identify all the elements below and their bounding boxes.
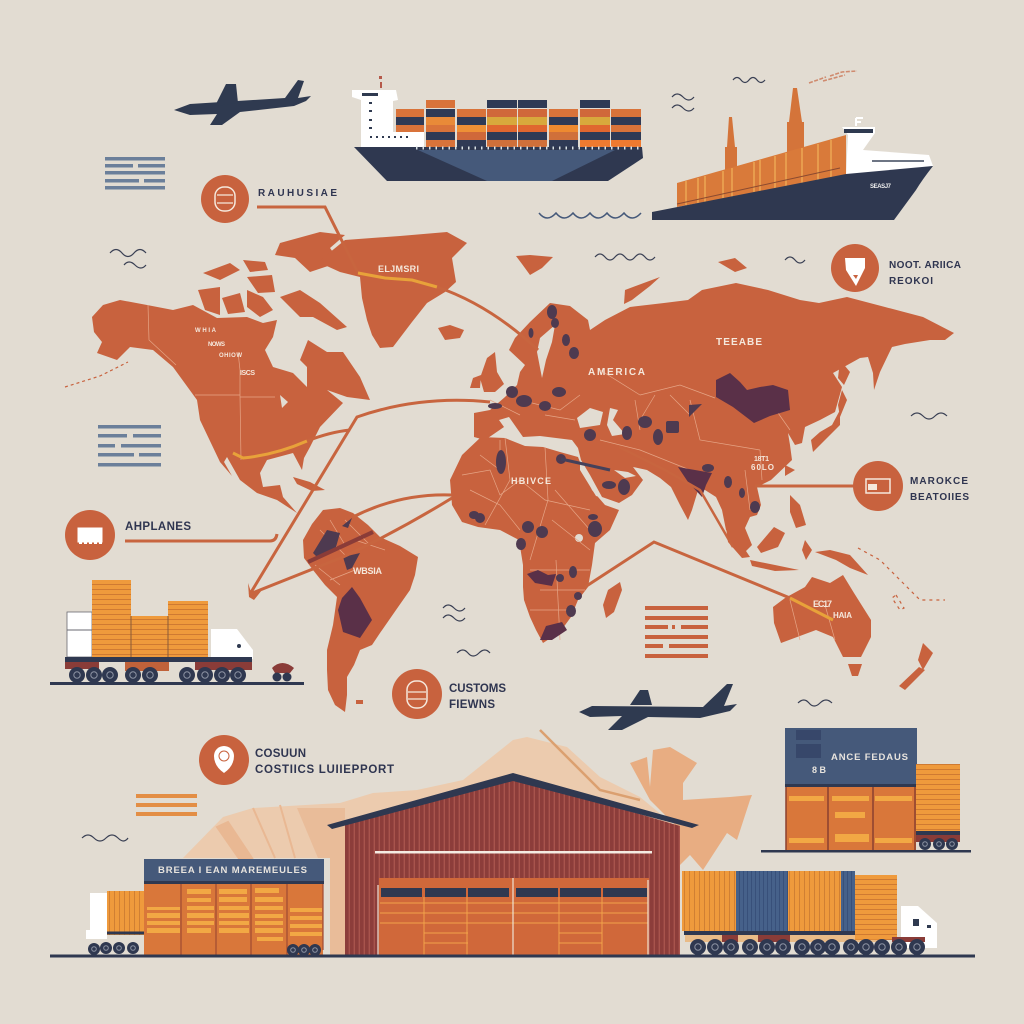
- british isles: [470, 352, 504, 392]
- cab: [901, 906, 937, 948]
- hull blue panel: [418, 150, 615, 181]
- warehouse: central: [327, 773, 699, 956]
- warehouse: left: BREEA I EAN MAREMEULES: [158, 865, 308, 876]
- callout: marokce beatoiies: [853, 461, 970, 511]
- route lines: [125, 207, 855, 620]
- greenland: [318, 232, 467, 348]
- cargo ship: angled view: [652, 88, 933, 220]
- falklands: [356, 700, 363, 704]
- new zealand: [899, 643, 933, 690]
- route: asia leader: [755, 484, 855, 488]
- dashed bars: lower left: [136, 794, 197, 816]
- arctic russia island: [718, 258, 747, 272]
- map labels: OHIOW: [219, 353, 243, 359]
- door windows: [381, 888, 647, 897]
- bridge: [842, 127, 933, 176]
- ship windows: [362, 93, 408, 138]
- callout: north africa region: [831, 244, 962, 292]
- door lines: [380, 897, 648, 955]
- map labels: ISCS: [240, 370, 256, 377]
- chassis: [65, 657, 252, 662]
- pacific islands: [858, 548, 945, 610]
- callout: rauhusiae: RAUHUSIAE: [258, 188, 338, 199]
- scalloped wave: [539, 213, 641, 218]
- map labels: NOWS: [208, 342, 226, 348]
- wave doodles: [82, 250, 947, 841]
- callout: airplanes: AHPLANES: [125, 521, 192, 533]
- interior borders: [148, 305, 835, 640]
- white trim: [375, 851, 652, 854]
- container ship: side view: [352, 76, 643, 181]
- callout: marokce beatoiies: BEATOIIES: [910, 492, 970, 503]
- iceland: [438, 325, 464, 340]
- callout: rauhusiae: [201, 175, 338, 223]
- arctic islands: [198, 232, 347, 330]
- distant bird scribble: [809, 71, 857, 83]
- building: right upper: 8 B: [812, 765, 826, 775]
- callout: marokce beatoiies: MAROKCE: [910, 476, 969, 487]
- warehouse: left: [86, 859, 324, 956]
- truck: right lower: [682, 871, 937, 955]
- madagascar: [603, 582, 622, 618]
- white box: [67, 612, 92, 657]
- truck: left: [50, 580, 304, 685]
- map labels: EC17: [813, 599, 833, 609]
- japan: [811, 360, 850, 452]
- ship name: SEASJ7: [870, 184, 892, 190]
- region: india: [678, 467, 712, 497]
- map labels: HAIA: [833, 611, 853, 620]
- route: airplanes label leader: [125, 534, 277, 541]
- map labels: 60LO: [751, 463, 775, 472]
- ship superstructure: [352, 90, 424, 147]
- tasmania: [848, 664, 862, 676]
- world map: [65, 232, 954, 712]
- blue upper: [785, 728, 917, 784]
- building: right upper: ANCE FEDAUS: [831, 752, 909, 763]
- africa: [450, 437, 619, 643]
- wheels: [919, 838, 958, 850]
- callout: airplanes: [65, 510, 192, 560]
- taiwan / philippines: [785, 465, 806, 528]
- occupied regions: [313, 305, 790, 640]
- door frame: [379, 878, 649, 955]
- europe and asia blobs: [506, 386, 518, 398]
- building: right upper: [761, 728, 971, 852]
- plane: top left: [174, 80, 311, 125]
- map labels: WBSIA: [353, 566, 383, 576]
- callout: customs: [392, 669, 507, 719]
- body: [144, 884, 323, 955]
- dashed bars: centre: [645, 606, 708, 658]
- region: mongolia: [716, 373, 790, 423]
- ship hull: [354, 147, 643, 181]
- callout: costiics: [199, 735, 395, 785]
- smoke stacks: [725, 117, 737, 175]
- map labels: ELJMSRI: [378, 264, 420, 274]
- map labels: HBIVCE: [511, 476, 552, 486]
- sign: [144, 859, 324, 881]
- map labels: WHIA: [195, 328, 217, 334]
- africa blobs: [496, 450, 506, 474]
- map labels: TEEABE: [716, 337, 763, 348]
- orange cargo: [92, 580, 131, 657]
- mast: [379, 76, 382, 88]
- inland seas and bays: [280, 325, 636, 542]
- callout: north africa region: NOOT. ARIICA: [889, 260, 962, 271]
- callout: costiics: COSTIICS LUIIEPPORT: [255, 764, 395, 776]
- ground: [50, 682, 304, 685]
- route: africa to australia: [585, 542, 790, 598]
- region: south america lower: [338, 587, 372, 638]
- map labels: [195, 264, 853, 620]
- callout: customs: FIEWNS: [449, 699, 496, 711]
- route: north america to europe: [250, 400, 490, 594]
- container stacks: [396, 100, 641, 147]
- trailer: [107, 891, 145, 935]
- wave doodle: between ships: [672, 94, 694, 111]
- callout: customs: CUSTOMS: [449, 683, 507, 695]
- novaya zemlya: [624, 277, 660, 304]
- dashed bars: left: [98, 425, 161, 466]
- chassis: [684, 931, 855, 935]
- plane: lower centre: [579, 684, 737, 730]
- south america: [303, 508, 418, 712]
- north america: [92, 300, 370, 513]
- body: [785, 784, 916, 787]
- callout: north africa region: REOKOI: [889, 276, 934, 287]
- aleutians: [65, 362, 128, 387]
- ground: [761, 850, 971, 852]
- map labels: AMERICA: [588, 367, 646, 378]
- shelves: [147, 888, 322, 941]
- route: africa to south america: [250, 498, 452, 594]
- wave doodle: top right of ship: [733, 78, 765, 82]
- region: south america upper: [313, 518, 360, 570]
- cab: [211, 629, 253, 659]
- map labels: 18T1: [754, 456, 770, 463]
- small cart: [272, 663, 294, 673]
- wheels: [690, 939, 925, 955]
- australia: [773, 575, 871, 657]
- indonesia: [726, 527, 812, 571]
- walls: [345, 777, 680, 956]
- central america islands: [293, 477, 325, 491]
- background hills and cranes: [183, 730, 752, 956]
- arrowhead: [248, 583, 262, 600]
- roof: [327, 773, 699, 829]
- hull: [652, 166, 933, 220]
- wheels: [69, 667, 246, 683]
- ground line: [50, 954, 975, 958]
- route: middle east to indian ocean: [619, 447, 733, 547]
- wheels: [88, 942, 321, 956]
- region: southern africa: [527, 570, 556, 586]
- dashed bars: top left: [105, 157, 165, 190]
- containers: [677, 135, 846, 207]
- route: greenland to scandinavia: [257, 207, 358, 273]
- eurasia: [474, 283, 954, 552]
- container: [916, 764, 960, 832]
- callout: costiics: COSUUN: [255, 748, 307, 760]
- svalbard: [516, 255, 553, 275]
- new guinea: [815, 550, 868, 575]
